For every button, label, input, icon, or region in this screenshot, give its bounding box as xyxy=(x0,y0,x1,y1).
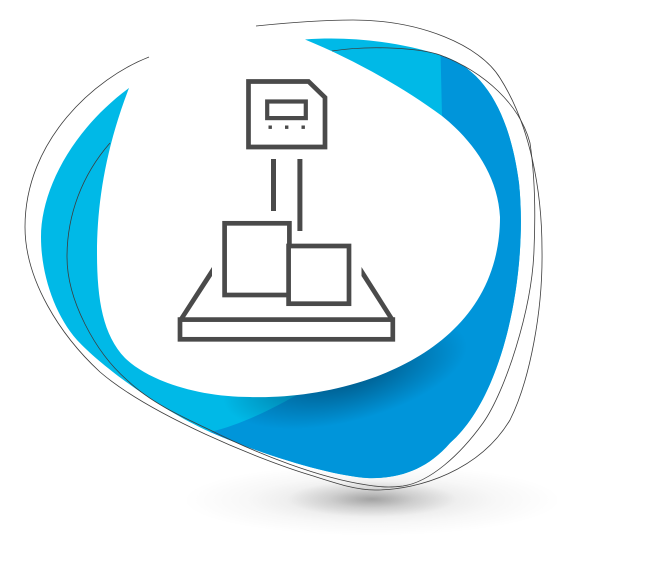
large box xyxy=(225,223,289,295)
small box xyxy=(289,246,349,304)
left pole xyxy=(271,159,276,211)
left platform edge xyxy=(178,267,212,319)
dark blue section xyxy=(210,56,521,478)
infographic: scale badge xyxy=(24,20,542,522)
soft shadow under white shape xyxy=(233,334,456,424)
inner thin outline xyxy=(67,48,535,487)
icon: weighing scale xyxy=(178,82,394,339)
right platform edge xyxy=(362,267,394,319)
scale display head xyxy=(248,82,325,147)
white inner shape xyxy=(97,40,500,397)
platform slab xyxy=(180,320,393,339)
outer thin outline xyxy=(25,20,542,490)
display screen xyxy=(267,102,306,118)
blob: colored ribbon xyxy=(41,38,521,478)
ground shadow xyxy=(182,464,562,536)
buttons xyxy=(268,126,305,129)
right pole xyxy=(297,159,302,231)
